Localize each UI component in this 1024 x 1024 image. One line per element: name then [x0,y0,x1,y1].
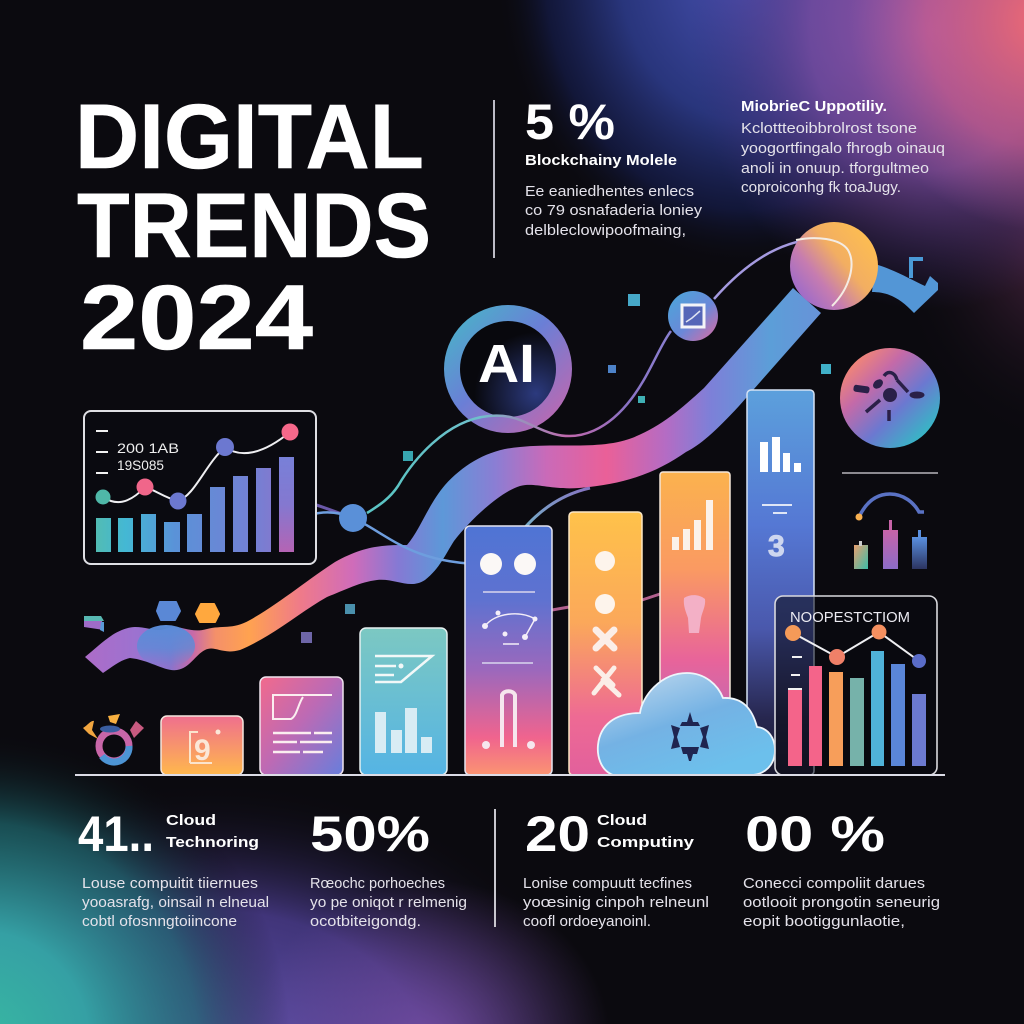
icon: gear ring [83,714,144,762]
cloud [598,673,775,775]
bars [788,651,926,766]
stat block: mobile: MiobrieC Uppotiliy. [741,99,887,115]
stat: cloud computing: Computiny [597,834,695,851]
stat: cloud technology [78,806,269,930]
ribbon trend arrow [85,288,821,673]
stat: zero percent: eopit bootiggunlaotie, [743,914,905,930]
stat block: blockchain: Blockchainy Molele [525,152,677,169]
panel: left chart: 19S085 [117,457,164,473]
stat: cloud technology: Louse compuitit tiiernues [82,876,258,892]
bottom divider [494,809,496,927]
panel: right chart: NOOPESTCTIOM [790,609,910,626]
icon: hand [684,595,705,633]
stat: fifty percent: Rœochc porhoeches [310,876,445,892]
decorative squares [301,294,831,643]
bar 1: 9 [194,734,211,767]
connector wave lines [293,239,853,610]
stat: cloud computing: Lonise compuutt tecfines [523,876,692,892]
stat block: blockchain: Ee eaniedhentes enlecs [525,184,694,200]
stat: fifty percent: ocotbiteigondg. [310,914,421,930]
sun node and tail [790,222,938,313]
icon: gauge with mini bars [854,494,927,569]
stat: cloud technology: yooasrafg, oinsail n elneual [82,895,269,911]
orb icon [840,348,940,448]
stat: fifty percent: yo pe oniqot r relmenig [310,895,467,911]
title [75,86,431,369]
bar 2 [260,677,343,775]
panel: left chart [84,411,316,564]
bar 7: 3 [768,530,785,563]
line series [96,424,298,510]
stat block: mobile: yoogortfingalo fhrogb oinauq [741,141,945,157]
bar 6 [660,472,730,775]
stat block: blockchain: delbleclowipoofmaing, [525,223,686,239]
stat block: blockchain: co 79 osnafaderia loniey [525,203,703,219]
icon: network hub [671,712,709,761]
baseline [75,774,945,776]
AI ring: AI [478,334,535,394]
stat: zero percent [743,806,940,930]
icon: small folder [84,616,104,632]
title: 2024 [80,267,313,369]
stat block: mobile: coproiconhg fk toaJugy. [741,180,901,196]
stat: cloud computing: 20 [525,806,590,862]
stat: cloud technology: Cloud [166,812,216,829]
stat: fifty percent [310,806,467,930]
stat: cloud computing: Cloud [597,812,647,829]
panel: right chart [775,596,937,775]
title: DIGITAL [75,86,424,188]
line series [785,624,926,668]
stat: zero percent: ootlooit prongotin seneurig [743,895,940,911]
bar 1 [161,716,243,775]
stat: cloud computing: coofl ordoeyanoinl. [523,914,651,930]
connector node [339,504,367,532]
stat: cloud computing: yoœsinig cinpoh relneunl [523,895,709,911]
bar 5 [569,512,642,775]
bars [96,457,294,552]
right divider [842,472,938,474]
top divider [493,100,495,258]
title: TRENDS [77,175,431,277]
bar 4 [465,526,552,775]
stat: zero percent: 00 % [745,806,885,862]
AI ring [452,313,564,425]
panel: left chart: 200 1AB [117,440,179,456]
stat: cloud technology: cobtl ofosnngtoiincone [82,914,237,930]
stat block: blockchain: 5 % [525,94,615,150]
stat block: mobile [741,99,945,196]
stat block: blockchain [525,94,703,239]
bar 3 [360,628,447,775]
stat: zero percent: Conecci compoliit darues [743,876,925,892]
bar 7 [747,390,814,775]
stat: cloud computing [523,806,709,930]
stat block: mobile: anoli in onuup. tforgultmeo [741,161,929,177]
stat: cloud technology: 41.. [78,806,154,862]
icon: small chart badge [668,291,718,341]
stat: fifty percent: 50% [310,806,430,862]
stat block: mobile: Kclottteoibbrolrost tsone [741,121,917,137]
stat: cloud technology: Technoring [166,834,259,851]
people icons on ribbon [137,602,219,667]
